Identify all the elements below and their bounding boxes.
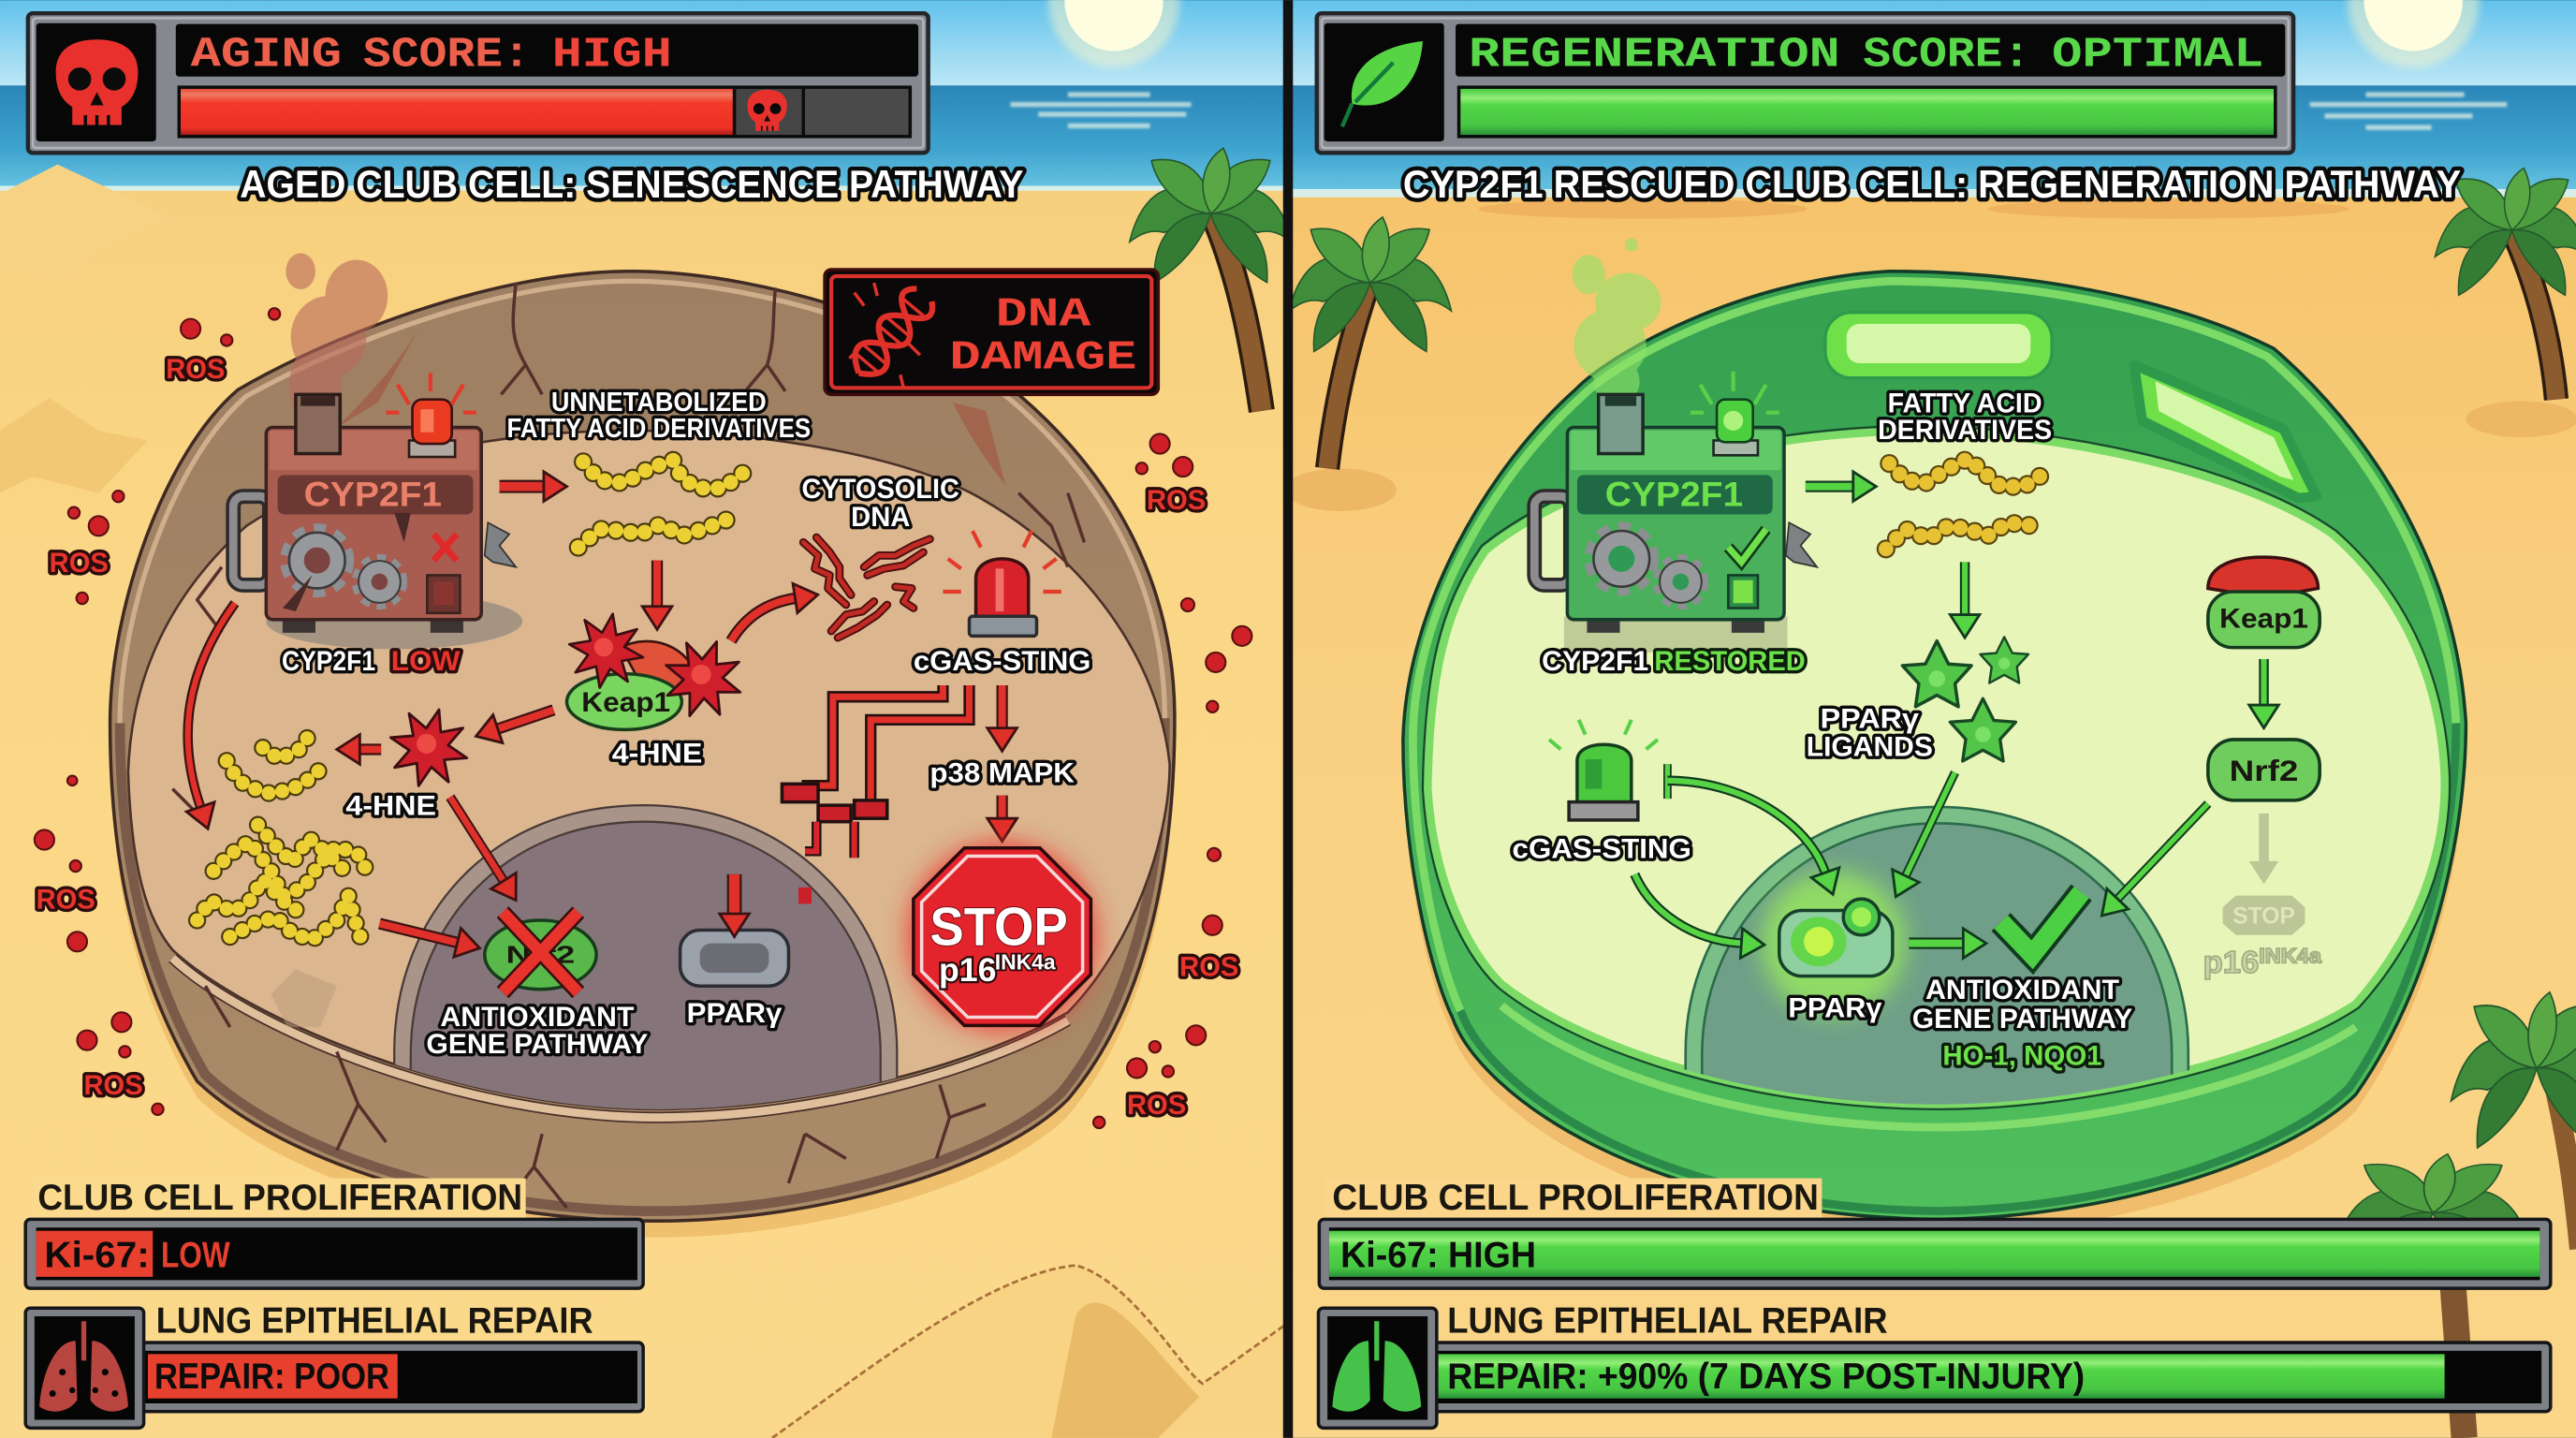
Nrf2 crossed out: Nrf2: [506, 941, 575, 969]
fatty acid chains right: [1886, 459, 2047, 549]
Keap1 right: Keap1: [2219, 604, 2308, 635]
score HUD: regeneration: [1317, 13, 2293, 153]
stop sign: p16INK4a: [907, 842, 1097, 1032]
Nrf2 crossed out: [485, 912, 596, 992]
aging score text: [191, 30, 672, 79]
proliferation bar left: Ki-67:: [44, 1235, 150, 1275]
label: PPARγ: PPARγ: [1788, 993, 1882, 1024]
label: CYP2F1 restored: CYP2F1: [1542, 646, 1648, 677]
label: DNA damage box: DAMAGE: [949, 334, 1137, 381]
arrow: 4-HNE to chain: [359, 746, 381, 753]
arrow: p38 to stop: [999, 796, 1005, 818]
label: antioxidant gene pathway HO-1 NQO1: ANTIOXIDANT: [1925, 975, 2119, 1005]
regeneration score text: SCORE:: [1863, 30, 2030, 79]
chains near 4-HNE: [227, 731, 326, 794]
glowing organelle top: [1825, 313, 2052, 378]
machine label: CYP2F1: [304, 476, 442, 514]
palm tree right panel right: [2435, 169, 2576, 437]
label: cytosolic DNA: CYTOSOLIC: [801, 474, 959, 505]
label: PPARγ: PPARγ: [687, 998, 783, 1029]
label: fatty acid derivatives: [1878, 389, 2052, 446]
label: p38 MAPK: p38 MAPK: [929, 758, 1075, 789]
repair label right: LUNG EPITHELIAL REPAIR: [1447, 1301, 1888, 1342]
label: antioxidant gene pathway: ANTIOXIDANT: [440, 1002, 634, 1033]
label: CYP2F1 restored: RESTORED: [1654, 646, 1806, 677]
label: fatty acid derivatives: FATTY ACID: [1888, 389, 2042, 419]
smoke right: [1573, 239, 1661, 404]
label: CYP2F1 LOW: LOW: [391, 646, 461, 677]
arrow: PPARγ to check: [1909, 940, 1963, 946]
aging score text: SCORE:: [363, 30, 531, 79]
repair bar left: [141, 1343, 643, 1412]
arrow: cGAS-STING to p38: [999, 685, 1005, 728]
label: cytosolic DNA: DNA: [851, 502, 910, 533]
keap1 with 4-HNE: [563, 608, 754, 729]
arrow: keap1 to 4-HNE: [498, 710, 553, 729]
palm tree left panel: [1130, 148, 1292, 411]
icon: cGAS-STING green siren: [1549, 720, 1658, 820]
antioxidant check mark: [2001, 892, 2082, 955]
smoke left: [285, 253, 388, 427]
lung icon left: [25, 1308, 144, 1428]
icon: small skull: [748, 90, 787, 131]
repair bar right: REPAIR: +90% (7 DAYS POST-INJURY): [1447, 1357, 2085, 1397]
label: CYP2F1 LOW: CYP2F1: [282, 646, 375, 677]
PPARγ inactive receptor: [681, 931, 788, 986]
proliferation label left: CLUB CELL PROLIFERATION: [37, 1178, 522, 1218]
nucleus: [393, 804, 899, 1109]
arrow: chains to Nrf2: [379, 924, 458, 943]
panel: rescued club cell: [1403, 271, 2466, 1236]
right panel background: beach: [1288, 0, 2576, 1438]
machine label: CYP2F1: [1605, 476, 1743, 514]
ROS labels: ROS: [1179, 952, 1238, 983]
label: CYP2F1 LOW: [282, 646, 461, 677]
label: cGAS-STING: cGAS-STING: [914, 646, 1090, 677]
stop sign: p16INK4a: STOP: [929, 897, 1068, 957]
repair bar right: [1431, 1343, 2551, 1412]
cell wall cracks: [172, 283, 1084, 1208]
regeneration score text: OPTIMAL: [2052, 30, 2264, 79]
ROS labels: ROS: [1147, 485, 1206, 516]
proliferation bar right: [1319, 1219, 2551, 1288]
arrow: fatty acid to ligands: [1962, 562, 1968, 615]
proliferation bar right: Ki-67: HIGH: [1340, 1235, 1536, 1275]
arrow: machine to fatty acid: [500, 483, 544, 491]
arrow: machine to fatty acid: [1806, 483, 1853, 490]
title: regeneration pathway: CYP2F1 RESCUED CLUB CELL: REGENERATION PATHWAY: [1403, 162, 2461, 206]
label: fatty acid derivatives: DERIVATIVES: [1878, 415, 2052, 446]
machine: CYP2F1 restored: [1534, 372, 1817, 653]
label: unmetabolized fatty acid: [506, 388, 811, 444]
repair bar left: REPAIR: POOR: [154, 1357, 389, 1397]
aging score text: AGING: [191, 30, 342, 79]
arrow: fatty acid to keap1: [654, 561, 661, 607]
Keap1 right: [2208, 557, 2320, 648]
nucleus: [1684, 805, 2190, 1105]
arrow: cGAS curve to PPARγ: [1634, 874, 1741, 944]
ROS particles left: [35, 308, 1251, 1128]
score HUD: aging: [28, 13, 929, 153]
label: cytosolic DNA: [801, 474, 959, 533]
arrow: 4-HNE to Nrf2: [450, 797, 504, 881]
proliferation bar left: [25, 1219, 643, 1288]
label: unmetabolized fatty acid: UNNETABOLIZED: [551, 388, 767, 418]
arrow: faded: [2261, 814, 2267, 861]
panel: aged club cell: [110, 271, 1175, 1238]
proliferation label right: CLUB CELL PROLIFERATION: [1332, 1178, 1819, 1218]
fatty acid chains: [578, 461, 742, 548]
arrow: keap1 to cytosolic dna: [731, 598, 795, 641]
ROS labels: [37, 354, 1238, 1121]
palm tree lower right: [2452, 992, 2576, 1249]
label: DNA damage box: DNA: [996, 292, 1091, 339]
panel divider: [1283, 0, 1293, 1438]
icon: skull: [56, 39, 138, 125]
lung icon right: [1318, 1308, 1437, 1428]
ROS labels: ROS: [84, 1070, 143, 1101]
faded stop: STOP: [2232, 904, 2295, 930]
proliferation bar left: LOW: [161, 1235, 230, 1275]
faded p16: [2203, 945, 2322, 980]
PPARγ ligand stars: [1902, 637, 2028, 761]
label: unmetabolized fatty acid: FATTY ACID DERIVATIVES: [506, 414, 811, 444]
icon: cGAS-STING siren: [943, 531, 1061, 636]
arrow: keap1 to nrf2: [2261, 659, 2267, 705]
label: antioxidant gene pathway HO-1 NQO1: GENE PATHWAY: [1912, 1004, 2132, 1034]
icon: cytosolic DNA fragments: [803, 537, 929, 638]
label: antioxidant gene pathway HO-1 NQO1: HO-1, NQO1: [1942, 1040, 2102, 1071]
regeneration score text: [1469, 30, 2264, 79]
label: 4-HNE second: 4-HNE: [345, 791, 436, 822]
label: PPARγ ligands: PPARγ: [1821, 704, 1919, 735]
regeneration score text: REGENERATION: [1469, 30, 1840, 79]
icon: leaf: [1342, 41, 1423, 126]
Nrf2: Nrf2: [2230, 754, 2298, 787]
keap1 with 4-HNE: Keap1: [581, 687, 670, 718]
arrow: ligands to PPARγ: [1906, 772, 1955, 876]
branching pipes: [782, 685, 970, 903]
sun left: [1048, 0, 1179, 67]
ROS labels: ROS: [50, 548, 109, 579]
inhibition arrow: cGAS-STING to PPARγ: [1667, 764, 1825, 873]
arrow: long curve from machine: [188, 603, 235, 807]
arrow: down to PPARγ: [730, 874, 739, 914]
label: PPARγ ligands: [1807, 704, 1933, 762]
stop sign: p16INK4a: INK4a: [995, 950, 1056, 975]
label: 4-HNE: 4-HNE: [612, 739, 702, 770]
label: PPARγ ligands: LIGANDS: [1807, 731, 1933, 762]
label: DNA damage box: [825, 270, 1158, 394]
ROS labels: ROS: [166, 354, 225, 385]
ROS labels: ROS: [37, 885, 95, 916]
label: cGAS-STING: cGAS-STING: [1513, 833, 1691, 864]
label: antioxidant gene pathway: [426, 1002, 648, 1060]
machine: CYP2F1 low: [233, 374, 522, 649]
ROS labels: ROS: [1127, 1090, 1186, 1121]
label: antioxidant gene pathway: GENE PATHWAY: [426, 1029, 648, 1060]
left panel background: beach: [0, 0, 1288, 1438]
label: antioxidant gene pathway HO-1 NQO1: [1912, 975, 2132, 1071]
Nrf2: [2208, 740, 2320, 800]
label: CYP2F1 restored: [1542, 646, 1806, 677]
aging score text: HIGH: [552, 30, 672, 79]
repair label left: LUNG EPITHELIAL REPAIR: [156, 1301, 593, 1342]
arrow: Nrf2 to check: [2117, 803, 2208, 899]
palm tree lower: [2339, 1154, 2527, 1438]
faded p16: INK4a: [2259, 945, 2322, 968]
accumulated fatty acid chains: [198, 825, 372, 940]
glowing organelle right: [2134, 365, 2317, 498]
sun right: [2348, 0, 2479, 67]
faded stop: [2223, 896, 2305, 935]
faded p16: p16: [2203, 946, 2259, 980]
palm tree right panel left: [1284, 217, 1451, 511]
title: aged pathway: AGED CLUB CELL: SENESCENCE PATHWAY: [240, 162, 1023, 206]
stop sign: p16INK4a: p16: [939, 952, 996, 989]
4-HNE spike: [380, 699, 477, 796]
nuclear PPARγ active with glow: [1761, 871, 1906, 1016]
